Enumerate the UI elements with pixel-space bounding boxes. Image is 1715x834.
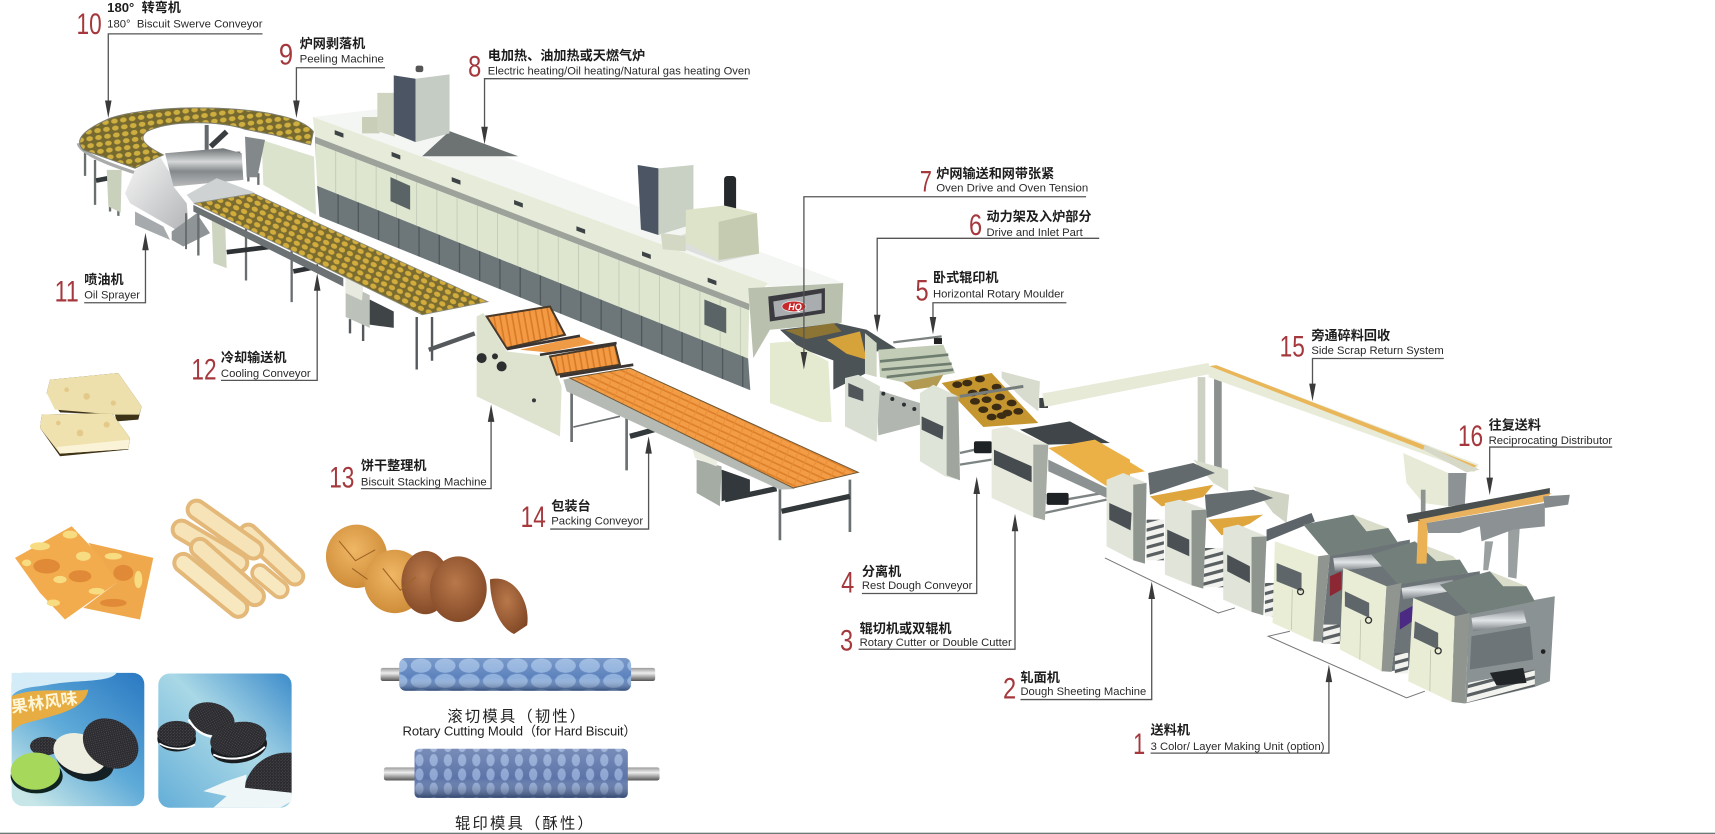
stacker bridge belt xyxy=(520,336,595,352)
scrap return system xyxy=(1042,363,1479,475)
label 4: 4 xyxy=(841,566,854,599)
label 6 xyxy=(874,208,1099,332)
label 14: 包装台 xyxy=(551,497,591,513)
label 3 xyxy=(840,514,1018,657)
unit B front xyxy=(1340,568,1387,671)
rotary cutting mould caption: 滚切模具（韧性） xyxy=(447,708,587,725)
label 11: 喷油机 xyxy=(84,272,124,287)
rotary cutting mould caption: Rotary Cutting Mould（for Hard Biscuit） xyxy=(403,724,637,739)
bottom edge line xyxy=(0,833,1715,834)
oven grey band xyxy=(315,137,749,310)
sprayer dome xyxy=(187,178,255,205)
unit C front xyxy=(1408,598,1455,702)
label 16: 16 xyxy=(1458,420,1483,453)
unit B back xyxy=(1392,571,1480,671)
10: swerve conveyor belt xyxy=(80,108,313,168)
label 15: 旁通碎料回收 xyxy=(1311,327,1390,343)
label 9: 9 xyxy=(279,38,293,71)
label 5: Horizontal Rotary Moulder xyxy=(933,288,1065,300)
label 14: Packing Conveyor xyxy=(551,516,643,528)
sheeter 3 xyxy=(1223,525,1267,615)
label 3: 3 xyxy=(840,624,853,657)
rotary moulding roller xyxy=(384,749,660,798)
label 8: Electric heating/Oil heating/Natural gas heating Oven xyxy=(488,65,750,77)
yellow dough xyxy=(1090,446,1145,478)
roller group 3 xyxy=(1267,513,1315,541)
label 3: Rotary Cutter or Double Cutter xyxy=(860,637,1012,649)
food: sandwich crackers xyxy=(40,373,142,456)
panel 1 title: 果林风味 xyxy=(10,689,79,717)
label 4 xyxy=(841,477,980,599)
dark inlet conveyor xyxy=(780,323,898,390)
oven top strip xyxy=(313,117,768,306)
oven xyxy=(313,109,844,390)
unit B hopper xyxy=(1415,541,1468,573)
label 8 xyxy=(468,47,750,144)
rotary moulding mould caption: 辊印模具（酥性） xyxy=(455,816,595,833)
packing rail xyxy=(563,378,795,490)
oven doors xyxy=(390,177,726,333)
moulder stand xyxy=(877,390,920,435)
label 7: 7 xyxy=(920,165,932,198)
3: cabinet A xyxy=(920,385,960,480)
label 7 xyxy=(801,165,1088,369)
label 5: 5 xyxy=(915,275,929,308)
oven shadows xyxy=(422,131,518,156)
label 5: 卧式辊印机 xyxy=(933,269,999,285)
packing belt xyxy=(570,368,858,488)
oven end with logo xyxy=(748,283,843,358)
label 16 xyxy=(1458,417,1613,495)
scrap support block xyxy=(1403,453,1448,506)
4: rest dough belt xyxy=(942,373,1038,427)
label 3: 辊切机或双辊机 xyxy=(860,620,951,636)
distributor vertical chute xyxy=(1417,520,1428,564)
sheeter 2 xyxy=(1165,500,1207,589)
sheeter 1 xyxy=(1107,473,1147,564)
label 1: 3 Color/ Layer Making Unit (option) xyxy=(1151,741,1325,753)
label 2: 2 xyxy=(1003,672,1016,705)
dark sheet belt xyxy=(1020,421,1110,445)
label 4: Rest Dough Conveyor xyxy=(862,580,973,592)
label 13: 13 xyxy=(329,462,354,494)
oven end with logo: HQ xyxy=(788,302,802,312)
inlet, moulder and rest dough section xyxy=(770,323,1130,520)
swerve conveyor, peeling section and oil sprayer xyxy=(78,108,316,246)
label 16: 往复送料 xyxy=(1489,417,1541,433)
cooling conveyor stand xyxy=(186,205,343,302)
5: moulder xyxy=(878,345,955,382)
label 10: 10 xyxy=(77,8,102,41)
label 13: 饼干整理机 xyxy=(361,457,427,473)
control cabinet 1 xyxy=(362,66,450,142)
label 10: 180° 转弯机 xyxy=(107,0,181,15)
label 1: 送料机 xyxy=(1151,722,1190,738)
label 2 xyxy=(1003,582,1155,705)
label 11: Oil Sprayer xyxy=(84,289,140,301)
stacker belt 2 xyxy=(550,345,620,375)
unit C hopper xyxy=(1490,571,1535,601)
oven band windows xyxy=(335,130,716,285)
stacker belt 1 xyxy=(487,306,565,348)
food: finger biscuits xyxy=(182,510,295,608)
label 2: 轧面机 xyxy=(1020,669,1060,685)
distributor housing xyxy=(1427,503,1545,541)
food: round cookies xyxy=(326,525,528,634)
scrap beam xyxy=(1039,383,1130,408)
label 11: 11 xyxy=(55,276,79,309)
sprayer hood xyxy=(125,157,188,234)
yellow sheet belt xyxy=(1048,440,1130,486)
label 15: Side Scrap Return System xyxy=(1311,345,1444,357)
label 14 xyxy=(521,436,652,534)
control cabinet 2 xyxy=(638,165,759,260)
cooling conveyor belt xyxy=(195,193,488,315)
label 12: Cooling Conveyor xyxy=(221,368,311,380)
label 13: Biscuit Stacking Machine xyxy=(361,476,487,488)
label 2: Dough Sheeting Machine xyxy=(1020,686,1146,698)
sprayer rear posts xyxy=(207,125,238,180)
label 12 xyxy=(191,273,320,386)
7: inlet block xyxy=(770,341,832,422)
oven top face xyxy=(313,109,844,286)
stacking machine and packing conveyor xyxy=(477,306,858,540)
label 15 xyxy=(1280,327,1444,401)
label 1: 1 xyxy=(1133,728,1145,761)
label 6: 动力架及入炉部分 xyxy=(987,208,1091,224)
unit C frame xyxy=(1465,596,1555,704)
packing electric box xyxy=(697,460,722,506)
unit A back xyxy=(1322,540,1410,643)
oreo panel 2 xyxy=(157,674,292,808)
roller group 2 xyxy=(1253,486,1289,523)
3: cabinet B xyxy=(992,426,1048,520)
4: rest dough frame xyxy=(1002,371,1040,411)
oven front panels xyxy=(315,143,749,359)
swerve supports xyxy=(85,152,258,216)
sheet belt rail xyxy=(1048,460,1107,498)
oreo panel 1 xyxy=(10,673,148,806)
packing stand xyxy=(572,386,850,540)
label 9 xyxy=(279,35,385,118)
rest dough frames xyxy=(960,446,1107,513)
label 8: 电加热、油加热或天燃气炉 xyxy=(488,47,645,63)
label 6: Drive and Inlet Part xyxy=(987,227,1083,239)
oven base xyxy=(317,186,750,390)
label 4: 分离机 xyxy=(862,563,901,579)
swerve conveyor rim xyxy=(78,143,137,173)
sprayer tray xyxy=(135,212,170,240)
sprayer drum xyxy=(165,148,243,187)
roller group 1 xyxy=(1193,460,1228,491)
sheeting and layer units xyxy=(1090,445,1570,704)
unit A hopper xyxy=(1353,515,1398,543)
bracket lines xyxy=(1105,558,1425,698)
label 11 xyxy=(55,233,149,309)
label 7: 炉网输送和网带张紧 xyxy=(936,165,1054,181)
label 10: 180° Biscuit Swerve Conveyor xyxy=(107,18,263,30)
peeling guard panel xyxy=(262,140,316,215)
label 15: 15 xyxy=(1280,330,1305,363)
label 7: Oven Drive and Oven Tension xyxy=(936,182,1088,194)
food: orange crackers xyxy=(15,526,153,620)
label 5 xyxy=(915,269,1066,334)
rotary cutting mould caption xyxy=(403,708,637,739)
label 16: Reciprocating Distributor xyxy=(1489,435,1613,447)
rotary cutting mould roller xyxy=(381,658,655,691)
cooling conveyor far legs and electric box xyxy=(346,278,475,369)
label 6: 6 xyxy=(969,209,982,242)
6: inlet post xyxy=(865,333,877,377)
distributor posts xyxy=(1483,541,1493,570)
label 14: 14 xyxy=(521,501,546,534)
label 8: 8 xyxy=(468,51,481,84)
stacker body xyxy=(477,313,562,436)
label 12: 冷却输送机 xyxy=(221,349,287,365)
unit A front xyxy=(1273,541,1318,641)
peeling drive xyxy=(245,137,265,177)
label 10 xyxy=(77,0,263,118)
label 1 xyxy=(1133,665,1332,761)
label 9: Peeling Machine xyxy=(300,53,384,65)
label 9: 炉网剥落机 xyxy=(300,35,365,51)
label 13 xyxy=(329,404,494,494)
label 12: 12 xyxy=(191,353,217,386)
